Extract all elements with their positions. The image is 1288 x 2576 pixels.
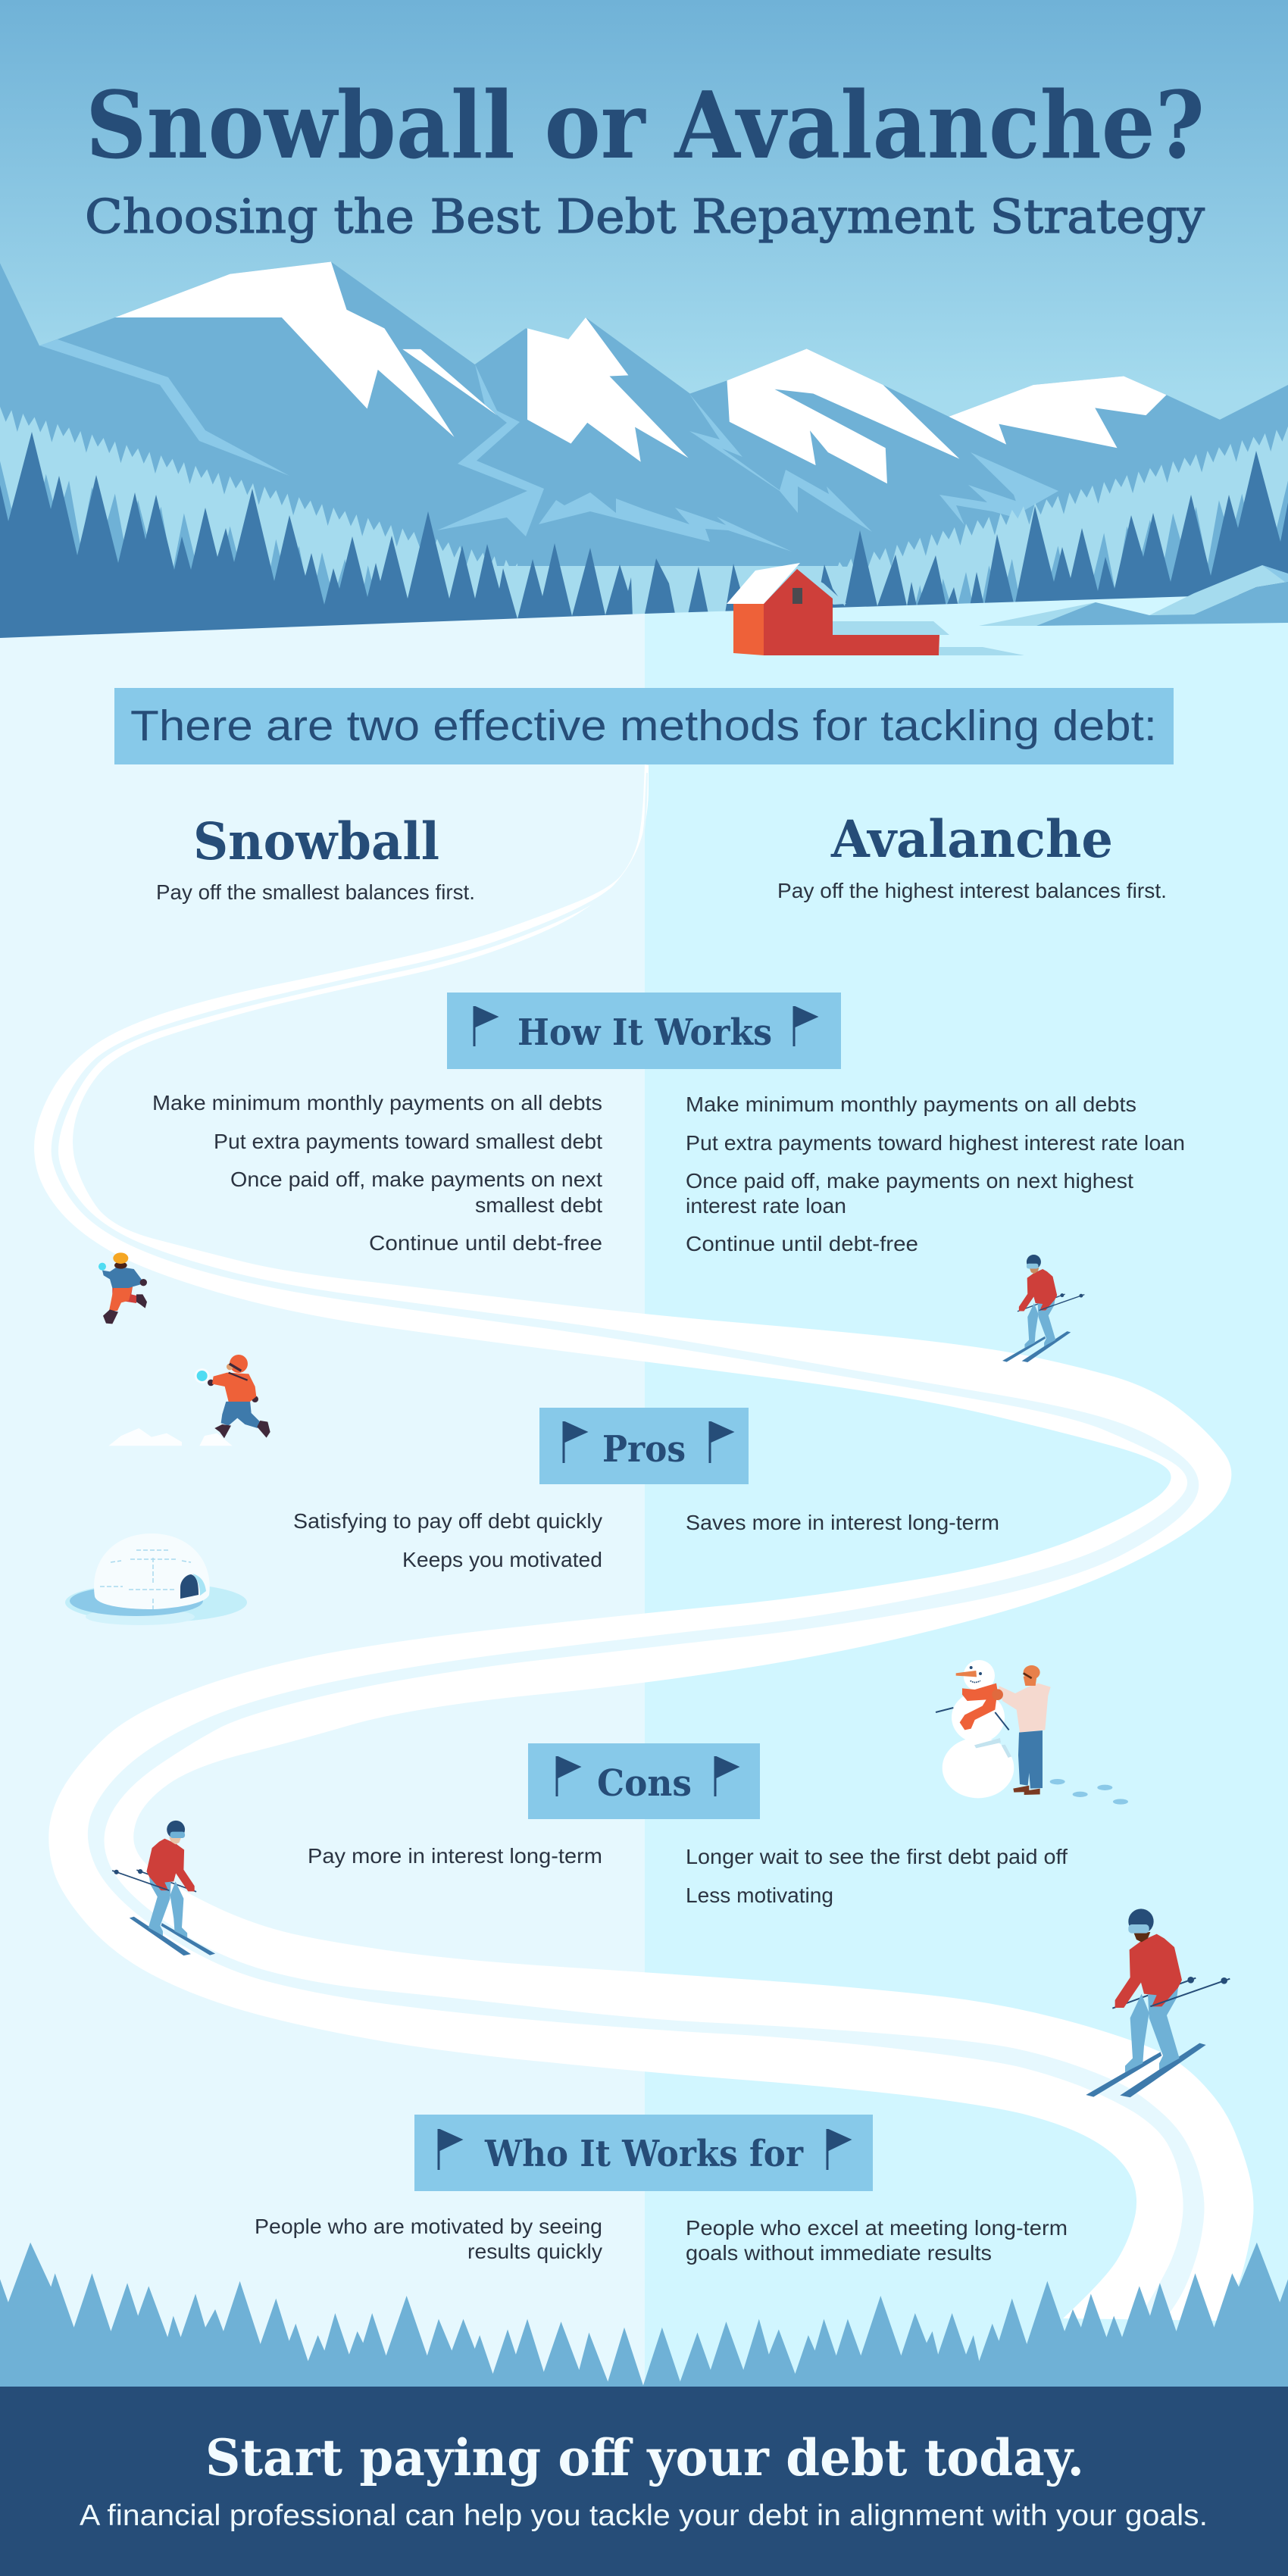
how it works: snowball list: Put extra payments toward smallest debt xyxy=(214,1130,602,1153)
ski trail xyxy=(34,764,1254,2334)
pros: snowball list xyxy=(293,1509,602,1571)
how it works: snowball list: Once paid off, make payments on next xyxy=(230,1168,602,1191)
section header: pros xyxy=(539,1408,749,1484)
cons box xyxy=(528,1743,760,1819)
cons: snowball list: Pay more in interest long-term xyxy=(308,1844,602,1868)
section header: how it works xyxy=(447,993,841,1069)
background: avalanche column xyxy=(645,591,1288,2424)
avalanche heading: Avalanche xyxy=(830,809,1113,869)
illustration: small skier right xyxy=(1002,1255,1084,1362)
how it works: avalanche list: Continue until debt-free xyxy=(686,1232,918,1255)
how it works box xyxy=(447,993,841,1069)
illustration: small skier left xyxy=(112,1821,215,1955)
subtitle: Choosing the Best Debt Repayment Strategy xyxy=(85,189,1205,244)
footprints xyxy=(1050,1779,1128,1805)
how it works: snowball list: Make minimum monthly payments on all debts xyxy=(152,1091,602,1114)
snow ground left xyxy=(0,614,645,682)
snow mounds xyxy=(108,1428,233,1446)
who it works for box xyxy=(414,2115,873,2191)
who it works for: snowball: People who are motivated by seeing xyxy=(255,2215,602,2238)
barn ground shadow xyxy=(939,647,1024,655)
dark tree line xyxy=(0,432,1288,652)
barn snowy roof xyxy=(727,563,800,604)
who it works for: avalanche: goals without immediate results xyxy=(686,2241,992,2265)
trail body xyxy=(34,764,1254,2321)
title: Snowball or Avalanche? xyxy=(86,70,1205,180)
snowball description: Pay off the smallest balances first. xyxy=(156,880,475,904)
flag left xyxy=(556,1756,582,1796)
igloo door rim xyxy=(192,1574,206,1596)
flag left xyxy=(562,1421,588,1463)
flag right xyxy=(709,1421,735,1463)
how it works: snowball list: smallest debt xyxy=(475,1193,602,1217)
flag right xyxy=(826,2129,852,2170)
how it works: snowball list: Continue until debt-free xyxy=(369,1231,602,1255)
lake band xyxy=(485,566,841,634)
section header: cons xyxy=(528,1743,760,1819)
deep tree layer xyxy=(0,461,506,659)
cons: avalanche list: Less motivating xyxy=(686,1884,833,1907)
pros: snowball list: Keeps you motivated xyxy=(402,1548,602,1571)
igloo lower patch xyxy=(86,1608,195,1625)
illustration: snowball kids xyxy=(98,1252,270,1446)
who it works for: snowball xyxy=(255,2215,602,2263)
barn front wall xyxy=(764,569,939,655)
pros heading: Pros xyxy=(602,1428,686,1471)
who it works for: snowball: results quickly xyxy=(467,2240,602,2263)
method: snowball xyxy=(156,811,475,904)
kid in orange jacket xyxy=(195,1355,270,1438)
barn window xyxy=(792,588,802,604)
how it works: avalanche list: interest rate loan xyxy=(686,1194,846,1218)
snow caps xyxy=(115,262,1167,483)
red barn xyxy=(727,563,1024,655)
background: sky xyxy=(0,0,1288,394)
intro banner box xyxy=(114,688,1174,764)
igloo dome xyxy=(94,1533,210,1609)
igloo blocks xyxy=(100,1550,191,1609)
igloo shadow xyxy=(70,1586,203,1616)
footer subline: A financial professional can help you tackle your debt in alignment with your goals. xyxy=(80,2499,1208,2532)
builder xyxy=(992,1665,1051,1795)
how it works heading: How It Works xyxy=(517,1011,772,1054)
kid in blue jacket xyxy=(98,1252,147,1324)
illustration: igloo xyxy=(65,1533,247,1625)
snow ground right xyxy=(645,593,1288,682)
cons heading: Cons xyxy=(597,1762,692,1805)
how it works: avalanche list: Put extra payments toward highest interest rate loan xyxy=(686,1131,1185,1155)
mountain ridges xyxy=(39,339,1058,552)
avalanche description: Pay off the highest interest balances first. xyxy=(777,879,1167,902)
pale tree layer xyxy=(0,407,517,652)
left forest: layered trees xyxy=(0,407,517,659)
igloo ice patch xyxy=(65,1583,247,1622)
how it works: snowball list xyxy=(152,1091,602,1255)
who it works for: avalanche xyxy=(686,2216,1068,2265)
pros: avalanche list: Saves more in interest long-term xyxy=(686,1511,999,1534)
trail centre groove xyxy=(52,773,1204,2334)
cons: avalanche list: Longer wait to see the first debt paid off xyxy=(686,1845,1068,1868)
how it works: avalanche list: Once paid off, make payments on next highest xyxy=(686,1169,1133,1193)
cons: avalanche list xyxy=(686,1845,1068,1907)
background: sky lower xyxy=(0,394,1288,652)
flag left xyxy=(473,1006,499,1046)
intro banner xyxy=(114,688,1174,764)
mountains xyxy=(0,262,1288,567)
right forest: layered trees xyxy=(771,427,1288,679)
snowball heading: Snowball xyxy=(193,811,439,871)
pros box xyxy=(539,1408,749,1484)
method: avalanche xyxy=(777,809,1167,902)
footer headline: Start paying off your debt today. xyxy=(205,2428,1084,2487)
barn side wall xyxy=(733,604,764,655)
flag right xyxy=(792,1006,818,1046)
who it works for heading: Who It Works for xyxy=(484,2133,804,2175)
background: snowball column xyxy=(0,606,645,2424)
section header: who it works for xyxy=(414,2115,873,2191)
barn back roof xyxy=(797,569,846,605)
illustration: large skier xyxy=(1086,1909,1230,2097)
igloo door xyxy=(180,1574,199,1599)
footer band xyxy=(0,2387,1288,2576)
pros: snowball list: Satisfying to pay off debt quickly xyxy=(293,1509,602,1533)
how it works: avalanche list xyxy=(686,1093,1185,1255)
illustration: snowman and builder xyxy=(936,1660,1128,1805)
intro banner text: There are two effective methods for tackling debt: xyxy=(130,702,1157,750)
flag left xyxy=(438,2129,464,2170)
snow drift tip xyxy=(1262,565,1288,582)
snow drift shade xyxy=(1036,582,1288,626)
who it works for: avalanche: People who excel at meeting long-term xyxy=(686,2216,1068,2240)
barn roof shadow xyxy=(833,621,949,635)
flag right xyxy=(714,1756,739,1796)
snowman xyxy=(936,1660,1014,1798)
bottom tree line xyxy=(0,2243,1288,2387)
snow drift pale xyxy=(979,565,1288,626)
how it works: avalanche list: Make minimum monthly payments on all debts xyxy=(686,1093,1136,1116)
